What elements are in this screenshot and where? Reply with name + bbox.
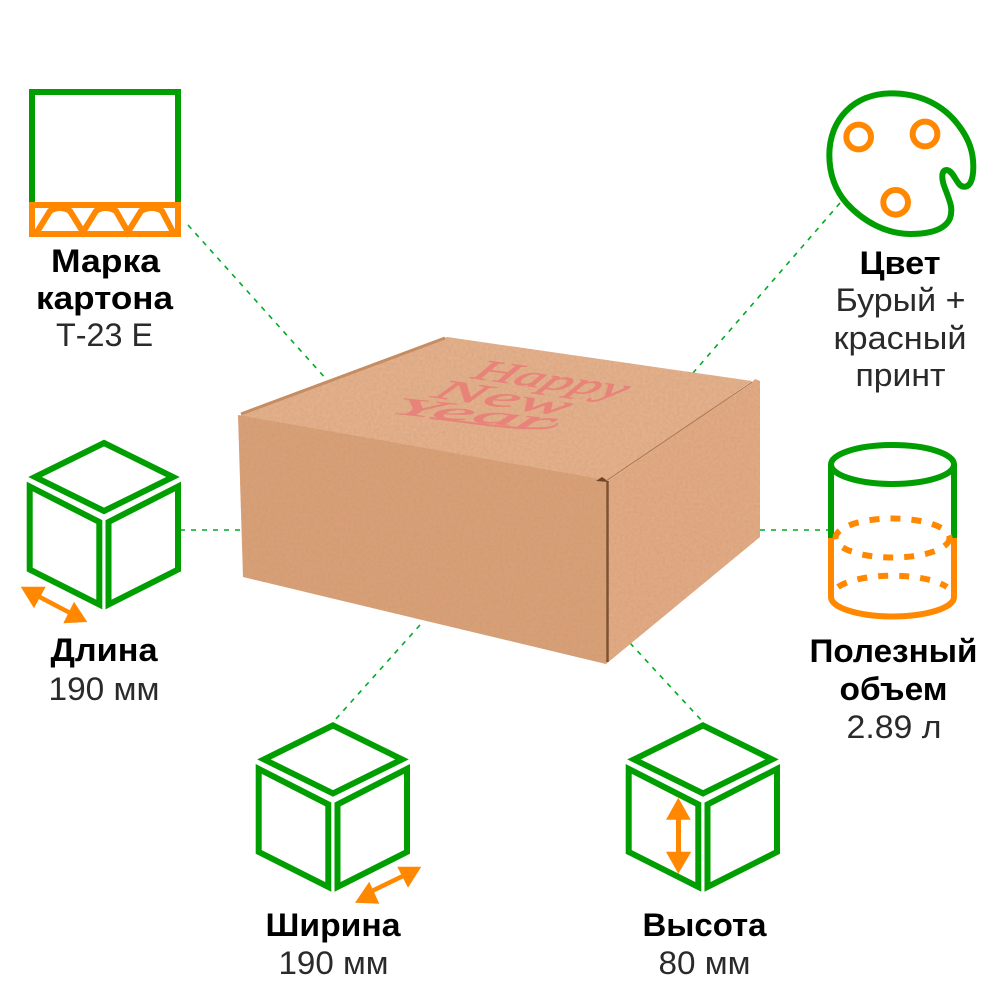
box top lid [239, 337, 752, 482]
box right panel [606, 379, 760, 664]
label: color: принт [856, 357, 946, 393]
cylinder top [831, 464, 954, 538]
label: cardboard grade: Т-23 Е [56, 317, 153, 353]
label: usable volume: Полезный [810, 633, 978, 669]
label: cardboard grade [36, 243, 173, 353]
dashed inner bottom [838, 576, 947, 587]
icon: cardboard grade [32, 92, 178, 234]
label: cardboard grade: Марка [51, 243, 160, 279]
icon: usable volume cylinder [831, 445, 954, 616]
label: color: Цвет [860, 245, 940, 281]
box lid seam [606, 382, 752, 481]
product photo: cardboard box [238, 337, 760, 664]
dashed fill level [836, 518, 950, 558]
printed text: Happy New Year: New [424, 373, 583, 422]
width arrow [355, 867, 421, 904]
label: color: Бурый + [836, 282, 966, 318]
icon: color palette [829, 93, 973, 234]
box front panel [238, 415, 606, 664]
cylinder bottom [831, 538, 954, 616]
box corner notch [596, 477, 609, 482]
label: cardboard grade: картона [36, 280, 173, 316]
label: length: 190 мм [48, 671, 160, 707]
label: color: красный [834, 320, 966, 356]
label: height: 80 мм [658, 945, 750, 981]
print flourish under Year [430, 418, 557, 428]
label: length [48, 632, 160, 707]
paint dab 1 [846, 125, 871, 149]
orange corrugated layer [32, 205, 178, 234]
cylinder rim [831, 445, 954, 484]
box corner seam [606, 481, 609, 662]
cube faces [629, 725, 777, 887]
palette outline [829, 93, 973, 234]
label: usable volume [810, 633, 978, 745]
cube faces [259, 725, 407, 887]
dashed connector lines [180, 203, 840, 722]
green box outline [32, 92, 178, 205]
cube faces [30, 443, 178, 604]
length arrow [21, 587, 87, 623]
label: usable volume: 2.89 л [846, 709, 942, 745]
paint dab 2 [913, 122, 937, 146]
label: color [834, 245, 966, 393]
label: length: Длина [50, 632, 158, 668]
paint dab 3 [883, 190, 908, 215]
icon: cube with length arrow [21, 443, 178, 623]
printed text: Happy New Year: Year [384, 392, 565, 435]
height arrow [666, 798, 691, 874]
label: width: 190 мм [278, 945, 388, 981]
label: usable volume: объем [840, 671, 948, 707]
printed text: Happy New Year [384, 354, 639, 435]
label: height: Высота [642, 907, 767, 943]
printed text: Happy New Year: Happy [463, 354, 639, 406]
label: height [642, 907, 767, 981]
label: width: Ширина [266, 907, 401, 943]
label: width [266, 907, 401, 981]
icon: cube with width arrow [259, 725, 421, 904]
icon: cube with height arrow [629, 725, 777, 887]
box back flap edge [241, 338, 445, 414]
